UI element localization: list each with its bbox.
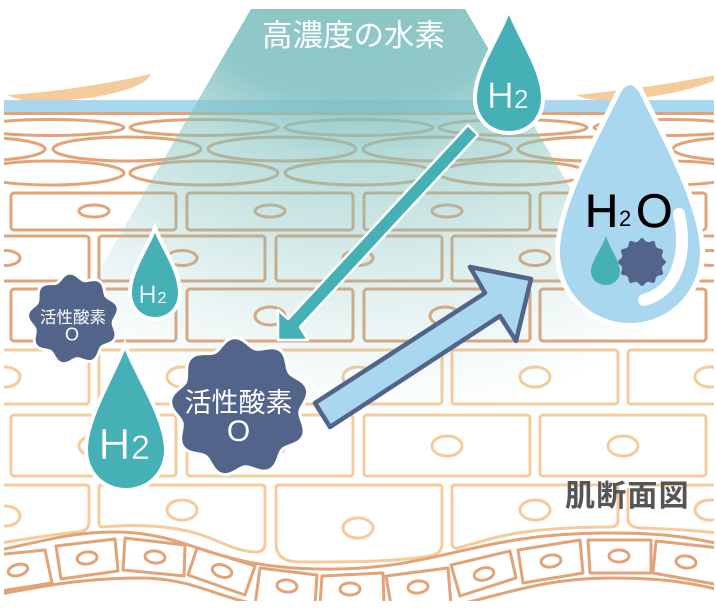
blob: small reactive oxygen: O: [65, 324, 79, 344]
drop: top H2: [477, 15, 541, 131]
drop: large H2: [88, 350, 164, 488]
drop: top H2: 2: [514, 84, 528, 114]
peeling skin flake right: [576, 75, 716, 100]
peeling skin flake left: [8, 74, 151, 101]
drop: small H2: 2: [158, 290, 166, 307]
label H2O: H: [585, 185, 618, 237]
blob: small reactive oxygen: [29, 275, 117, 362]
arrow: reactive oxygen to water: [315, 267, 531, 427]
blob: large reactive oxygen: 活性酸素: [184, 388, 292, 418]
upper cell rows: [0, 193, 716, 341]
icon: small teal drop: [591, 236, 620, 285]
icon: small reactive oxygen blob: [618, 238, 666, 286]
arrow: H2 to reactive oxygen: [278, 125, 478, 340]
drop: top H2: H: [487, 75, 514, 116]
blob: small reactive oxygen: 活性酸素: [40, 308, 106, 327]
basal cell layer: [0, 532, 716, 605]
lower cell rows: [0, 350, 716, 562]
stratum corneum ellipses: [0, 114, 716, 185]
drop: small H2: H: [138, 281, 157, 309]
heading: high concentration hydrogen: 高濃度の水素: [262, 19, 445, 53]
highlight: [644, 214, 682, 300]
caption: skin cross-section: 肌断面図: [565, 480, 690, 513]
blob: large reactive oxygen: O: [227, 415, 250, 448]
drop: water H2O: 2: [619, 206, 631, 231]
drop: small H2: [132, 233, 178, 317]
blob: large reactive oxygen: [172, 339, 306, 473]
drop: large H2: 2: [131, 429, 150, 467]
drop: large H2: H: [98, 420, 130, 469]
surface water band: [4, 100, 714, 112]
drop: water H2O: [560, 85, 700, 323]
drop: water H2O: O: [636, 184, 673, 237]
